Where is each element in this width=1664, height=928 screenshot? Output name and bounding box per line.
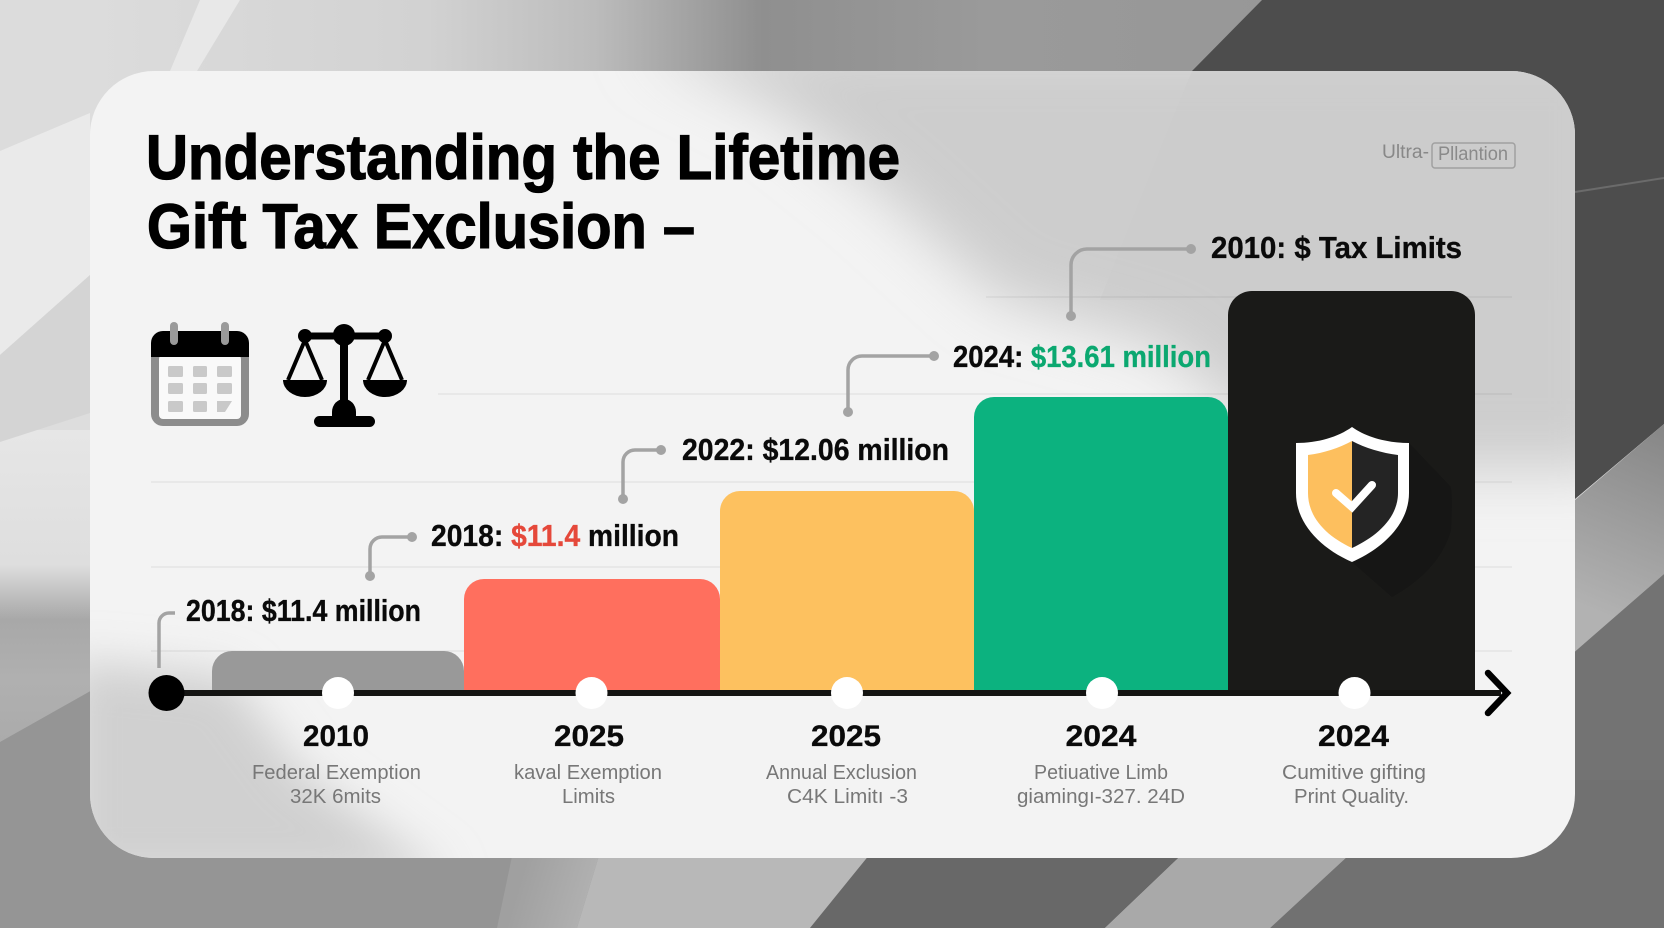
value labels: 2010: $ Tax Limits xyxy=(1211,230,1462,265)
timeline axis with arrow xyxy=(148,673,1507,713)
column: 2025 first: Limits xyxy=(562,786,615,808)
connectors xyxy=(159,244,1196,668)
value labels xyxy=(186,230,1462,628)
bar: 2022 yellow xyxy=(720,491,974,691)
column: 2024 second xyxy=(1282,720,1426,808)
value labels: 2018: $11.4 million xyxy=(186,593,421,628)
column: 2024 second: Cumitive gifting xyxy=(1282,762,1426,784)
bar: 2010 grey xyxy=(212,651,464,691)
column: 2025 first: 2025 xyxy=(554,720,624,753)
column: 2025 first xyxy=(514,720,662,808)
icon: calendar xyxy=(151,322,249,426)
badge: ultra resolution: Ultra- xyxy=(1382,142,1429,163)
chart grid lines xyxy=(151,297,1512,651)
title: Gift Tax Exclusion – xyxy=(147,192,695,262)
column: 2024 first: giamingı-327. 24D xyxy=(1017,786,1185,808)
column: 2024 second: Print Quality. xyxy=(1294,786,1409,808)
column: 2024 first: 2024 xyxy=(1066,720,1137,753)
column: 2025 second: C4K Limitı -3 xyxy=(787,786,908,808)
panel: main card xyxy=(90,71,1575,858)
column: 2010: 32K 6mits xyxy=(290,786,381,808)
column: 2024 first: Petiuative Limb xyxy=(1034,762,1168,784)
icon: balance scales xyxy=(283,324,407,427)
bar: 2018 red xyxy=(464,579,720,691)
title: Understanding the Lifetime xyxy=(146,123,900,193)
column: 2025 first: kaval Exemption xyxy=(514,762,662,784)
column: 2024 second: 2024 xyxy=(1318,720,1389,753)
column: 2024 first xyxy=(1017,720,1185,808)
column: 2010: Federal Exemption xyxy=(252,762,421,784)
value labels: 2024: $13.61 million xyxy=(953,339,1211,374)
bar: 2024 green xyxy=(974,397,1228,691)
timeline markers xyxy=(322,677,1370,709)
value labels: 2022: $12.06 million xyxy=(682,432,949,467)
column: 2025 second xyxy=(766,720,917,808)
column: 2010: 2010 xyxy=(303,720,369,753)
column: 2010 xyxy=(252,720,421,808)
value labels: 2018: $11.4 million xyxy=(431,518,679,553)
title xyxy=(146,123,900,262)
bar: black with shield xyxy=(1228,291,1475,696)
icon: shield with check xyxy=(1296,427,1452,597)
badge: ultra resolution xyxy=(1382,142,1515,168)
column: 2025 second: Annual Exclusion xyxy=(766,762,917,784)
badge: ultra resolution: Pllantion xyxy=(1438,144,1508,165)
column: 2025 second: 2025 xyxy=(811,720,881,753)
